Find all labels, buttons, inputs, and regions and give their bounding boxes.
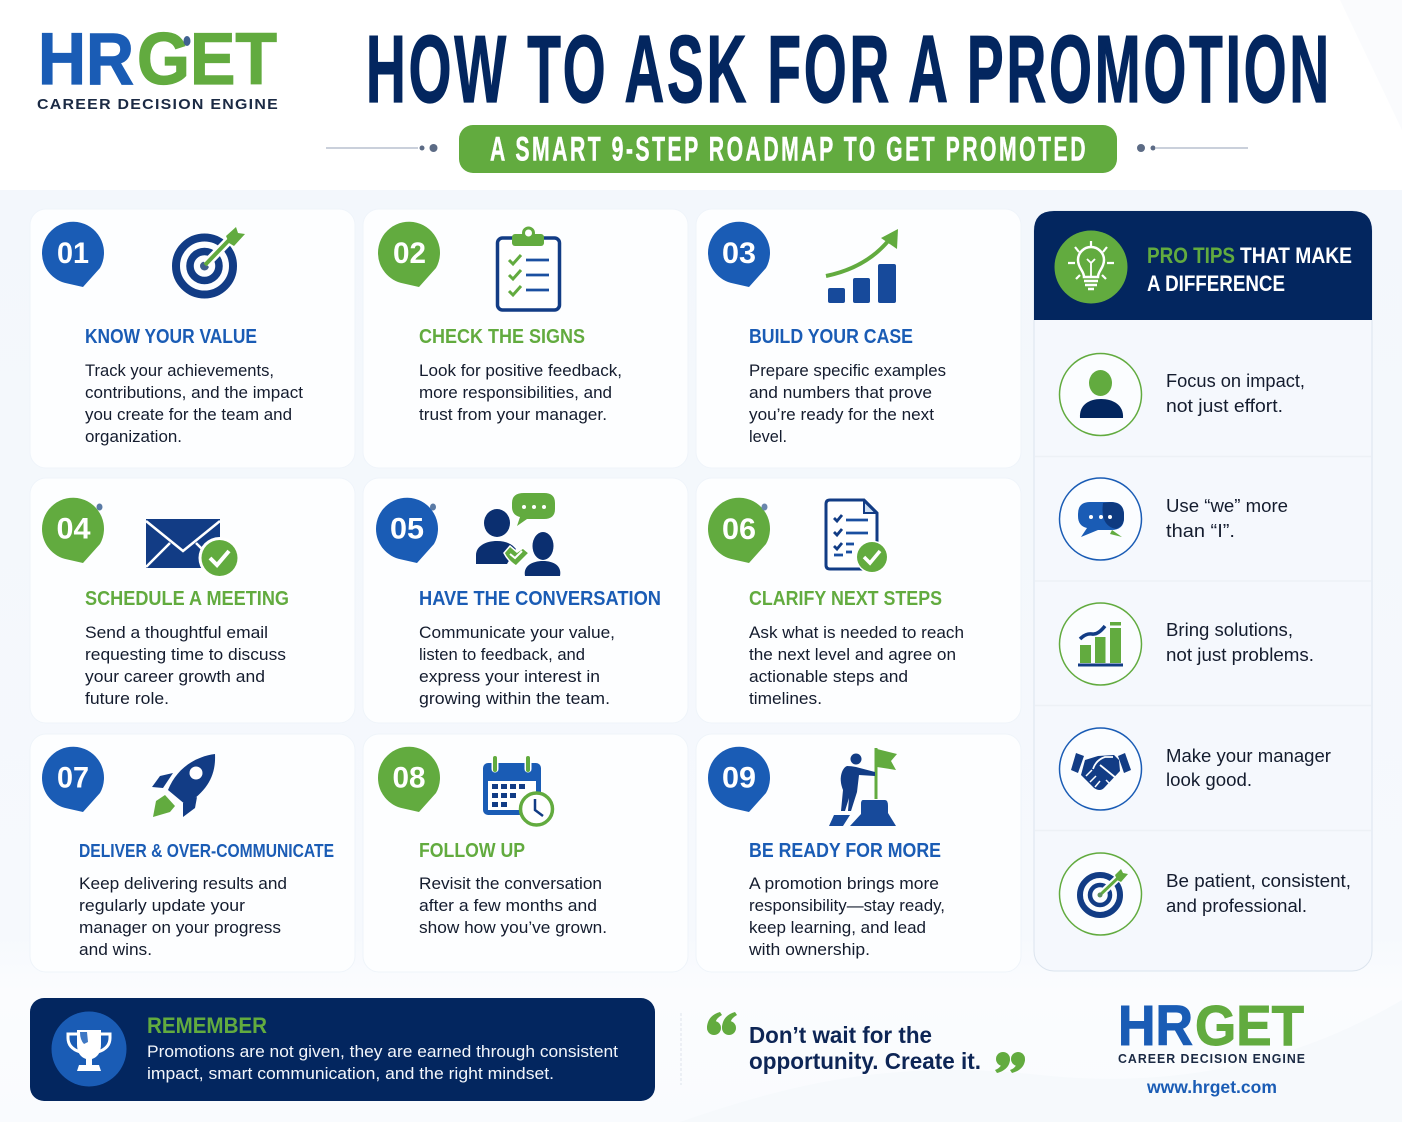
body text: after a few months and [419,896,597,915]
badge 09 [708,747,770,812]
icon: trophy [52,1012,126,1086]
body text: Ask what is needed to reach [749,623,964,642]
badge 07: 07 [57,762,89,794]
logo wordmark: GET [137,19,277,100]
panel: step 3 [696,209,1021,468]
body text: requesting time to discuss [85,645,286,664]
badge 01: 01 [57,237,89,270]
footer logo: HR [1118,994,1193,1058]
body text: Track your achievements, [85,361,274,380]
body text: show how you’ve grown. [419,918,607,937]
tip: bring solutions: Bring solutions, [1166,619,1293,640]
badge 03: 03 [722,237,756,270]
tip: be patient [1060,853,1351,935]
badge 05 [376,498,438,563]
remember text: impact, smart communication, and the right mindset. [147,1064,554,1083]
panel: step 2 [363,209,688,468]
icon: target [176,227,245,294]
body text: actionable steps and [749,667,908,686]
body text: organization. [85,427,182,446]
icon: rocket [152,754,215,817]
header: logo [37,19,279,113]
body text: Send a thoughtful email [85,623,268,642]
icon: conversation [476,493,560,576]
panel: step 6 [696,478,1021,723]
tip: bring solutions: not just problems. [1166,644,1314,665]
body text: express your interest in [419,667,600,686]
badge 06 [708,498,770,563]
pro tips title: PRO TIPS [1147,243,1235,268]
body text: the next level and agree on [749,645,956,664]
badge 07 [42,747,104,812]
badge 03 [708,222,770,287]
remember heading: REMEMBER [147,1013,267,1038]
panel: step 5 [363,478,688,723]
logo wordmark: HR [38,19,134,100]
body text [79,874,287,959]
panel: pro tips [1034,211,1372,971]
panel: step 4 [30,478,355,723]
body text: level. [749,427,787,446]
heading: BE READY FOR MORE [749,840,941,862]
heading: CLARIFY NEXT STEPS [749,588,942,610]
subtitle banner [459,125,1117,173]
tip: be patient: and professional. [1166,895,1307,916]
badge 08: 08 [392,762,426,794]
body text: with ownership. [748,940,870,959]
badge 02: 02 [393,237,426,270]
body text: more responsibilities, and [419,383,612,402]
badge 04: 04 [56,512,91,546]
body text: Keep delivering results and [79,874,287,893]
body text [749,361,946,446]
pro tips title: A DIFFERENCE [1147,271,1285,296]
icon: person planting flag [829,748,897,826]
heading: DELIVER & OVER-COMMUNICATE [79,841,334,861]
body text [748,874,945,959]
icon: calendar with clock [483,758,552,825]
tip: focus on impact [1060,354,1305,436]
panel: step 9 [696,734,1021,972]
footer logo [1118,994,1306,1097]
tip: use we more than I: Use “we” more [1166,495,1288,516]
badge 06: 06 [722,513,756,546]
panel: step 8 [363,734,688,972]
badge 01 [42,222,104,287]
body text [419,361,622,424]
body text: trust from your manager. [419,405,607,424]
quote text: opportunity. Create it. [749,1048,981,1074]
body text [749,623,964,708]
website: www.hrget.com [1146,1077,1277,1097]
badge 09: 09 [722,762,756,794]
tip: make your manager look good [1060,728,1331,810]
pro tips title [1147,243,1352,296]
heading: HAVE THE CONVERSATION [419,588,661,610]
tip: use we more than I [1060,478,1288,560]
badge 05: 05 [390,512,424,546]
footer logo: GET [1195,994,1304,1058]
tip: use we more than I: than “I”. [1166,520,1235,541]
heading: SCHEDULE A MEETING [85,588,289,610]
body text [419,623,615,708]
body text: and wins. [79,940,152,959]
logo tagline: CAREER DECISION ENGINE [37,96,279,113]
panel: step 7 [30,734,355,972]
icon: checklist document [826,500,888,574]
body text: Prepare specific examples [749,361,946,380]
body text: A promotion brings more [749,874,939,893]
quote text: Don’t wait for the [749,1022,932,1048]
body text: contributions, and the impact [85,383,303,402]
body text: listen to feedback, and [419,645,585,664]
heading: BUILD YOUR CASE [749,326,913,348]
heading: KNOW YOUR VALUE [85,326,257,348]
body text: growing within the team. [419,689,610,708]
tip: make your manager look good: Make your manager [1166,745,1331,766]
body text: keep learning, and lead [749,918,926,937]
body text: you’re ready for the next [749,405,934,424]
body text: Communicate your value, [419,623,615,642]
quote [707,1012,1025,1074]
tip: be patient: Be patient, consistent, [1166,870,1351,891]
heading: CHECK THE SIGNS [419,326,585,348]
tip: focus on impact: Focus on impact, [1166,370,1305,391]
badge 08 [378,747,440,812]
footer tagline: CAREER DECISION ENGINE [1118,1052,1306,1066]
body text [85,361,303,446]
remember text [147,1042,618,1083]
quote text [749,1022,981,1074]
body text: regularly update your [79,896,245,915]
tip: bring solutions [1060,603,1314,685]
badge 04 [42,498,104,563]
body text [419,874,607,937]
opening quote mark [707,1012,737,1035]
icon: envelope with check [146,519,240,579]
body text: responsibility—stay ready, [749,896,945,915]
body text: your career growth and [85,667,265,686]
pro tips header [1034,211,1372,320]
body text: future role. [85,689,169,708]
body text: and numbers that prove [749,383,932,402]
panel: step 1 [30,209,355,468]
icon: clipboard [498,228,560,310]
badge 02 [378,222,440,287]
pro tips title: THAT MAKE [1240,243,1352,268]
icon: growth chart [826,229,898,303]
icon: lightbulb [1054,230,1128,304]
tip: focus on impact: not just effort. [1166,395,1283,416]
tip: make your manager look good: look good. [1166,769,1252,790]
remember text: Promotions are not given, they are earned through consistent [147,1042,618,1061]
body text: manager on your progress [79,918,281,937]
body text: Revisit the conversation [419,874,602,893]
body text: Look for positive feedback, [419,361,622,380]
closing quote mark [995,1052,1025,1073]
body text [85,623,286,708]
body text: timelines. [749,689,822,708]
logo wordmark [38,19,277,100]
heading: FOLLOW UP [419,840,525,862]
body text: you create for the team and [85,405,292,424]
callout: remember [30,998,655,1101]
